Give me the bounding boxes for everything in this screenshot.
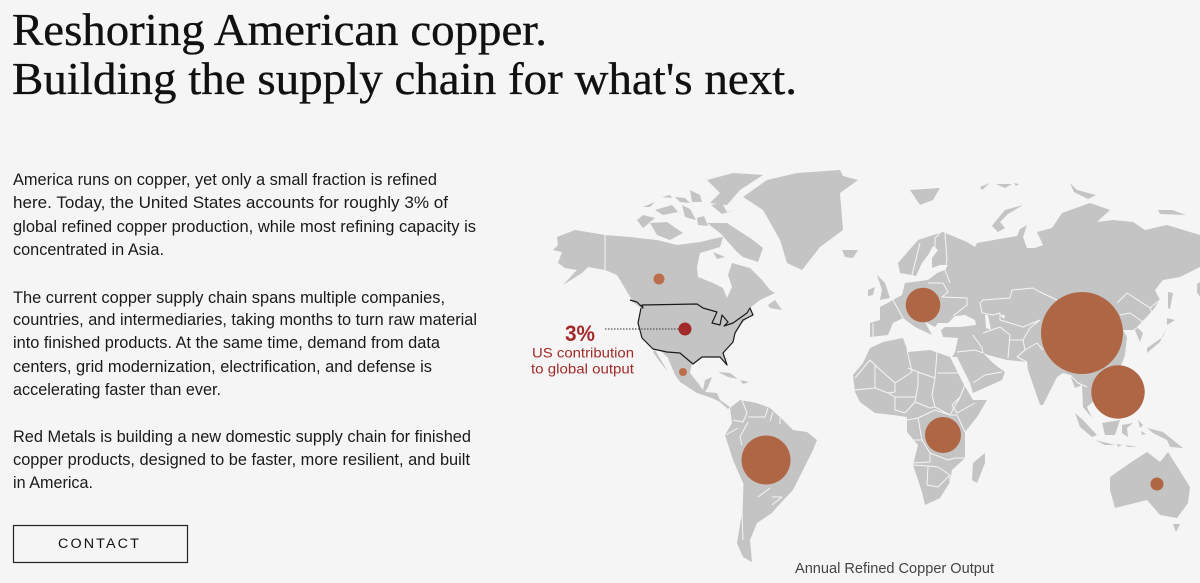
world map bbox=[553, 170, 1200, 562]
callout: us contribution: 3% bbox=[565, 321, 595, 346]
text block: intro paragraph bbox=[13, 170, 476, 259]
text block: supply chain paragraph: countries, and intermediaries, taking months to turn raw material bbox=[13, 310, 477, 329]
text block: intro paragraph: concentrated in Asia. bbox=[13, 240, 164, 259]
islands: eurasia and oceania bbox=[868, 183, 1200, 532]
text block: supply chain paragraph: centers, grid modernization, electrification, and defense is bbox=[13, 357, 432, 376]
text block: Red Metals paragraph: copper products, designed to be faster, more resilient, and built bbox=[13, 450, 470, 469]
callout: us contribution: to global output bbox=[531, 360, 634, 376]
title: Reshoring American copper. bbox=[12, 5, 547, 55]
text block: Red Metals paragraph: in America. bbox=[13, 473, 93, 492]
eurasia landmass bbox=[870, 203, 1200, 418]
production bubbles bbox=[654, 274, 1164, 490]
united states highlighted outline bbox=[630, 300, 753, 365]
callout: us contribution: US contribution bbox=[532, 344, 634, 360]
text block: Red Metals paragraph: Red Metals is building a new domestic supply chain for finished bbox=[13, 427, 471, 446]
text block: intro paragraph: global refined copper production, while most refining capacity is bbox=[13, 217, 476, 236]
country borders bbox=[605, 233, 1160, 540]
text block: supply chain paragraph: The current copper supply chain spans multiple companies, bbox=[13, 288, 445, 307]
text block: supply chain paragraph: into finished products. At the same time, demand from data bbox=[13, 333, 441, 352]
south america landmass bbox=[725, 400, 817, 562]
inland seas bbox=[985, 315, 1005, 330]
text block: supply chain paragraph: accelerating faster than ever. bbox=[13, 380, 221, 399]
us marker and dotted leader bbox=[605, 322, 692, 336]
north america landmass bbox=[553, 170, 858, 409]
map caption: Annual Refined Copper Output bbox=[795, 561, 994, 577]
contact button bbox=[14, 526, 188, 562]
title: Building the supply chain for what's next. bbox=[12, 54, 797, 104]
text block: intro paragraph: here. Today, the United States accounts for roughly 3% of bbox=[13, 193, 448, 212]
contact button: CONTACT bbox=[58, 536, 141, 551]
text block: Red Metals paragraph bbox=[13, 427, 471, 492]
text block: intro paragraph: America runs on copper, yet only a small fraction is refined bbox=[13, 170, 437, 189]
title bbox=[12, 5, 797, 104]
callout: us contribution bbox=[531, 321, 634, 376]
africa landmass bbox=[853, 338, 987, 505]
text block: supply chain paragraph bbox=[13, 288, 477, 399]
